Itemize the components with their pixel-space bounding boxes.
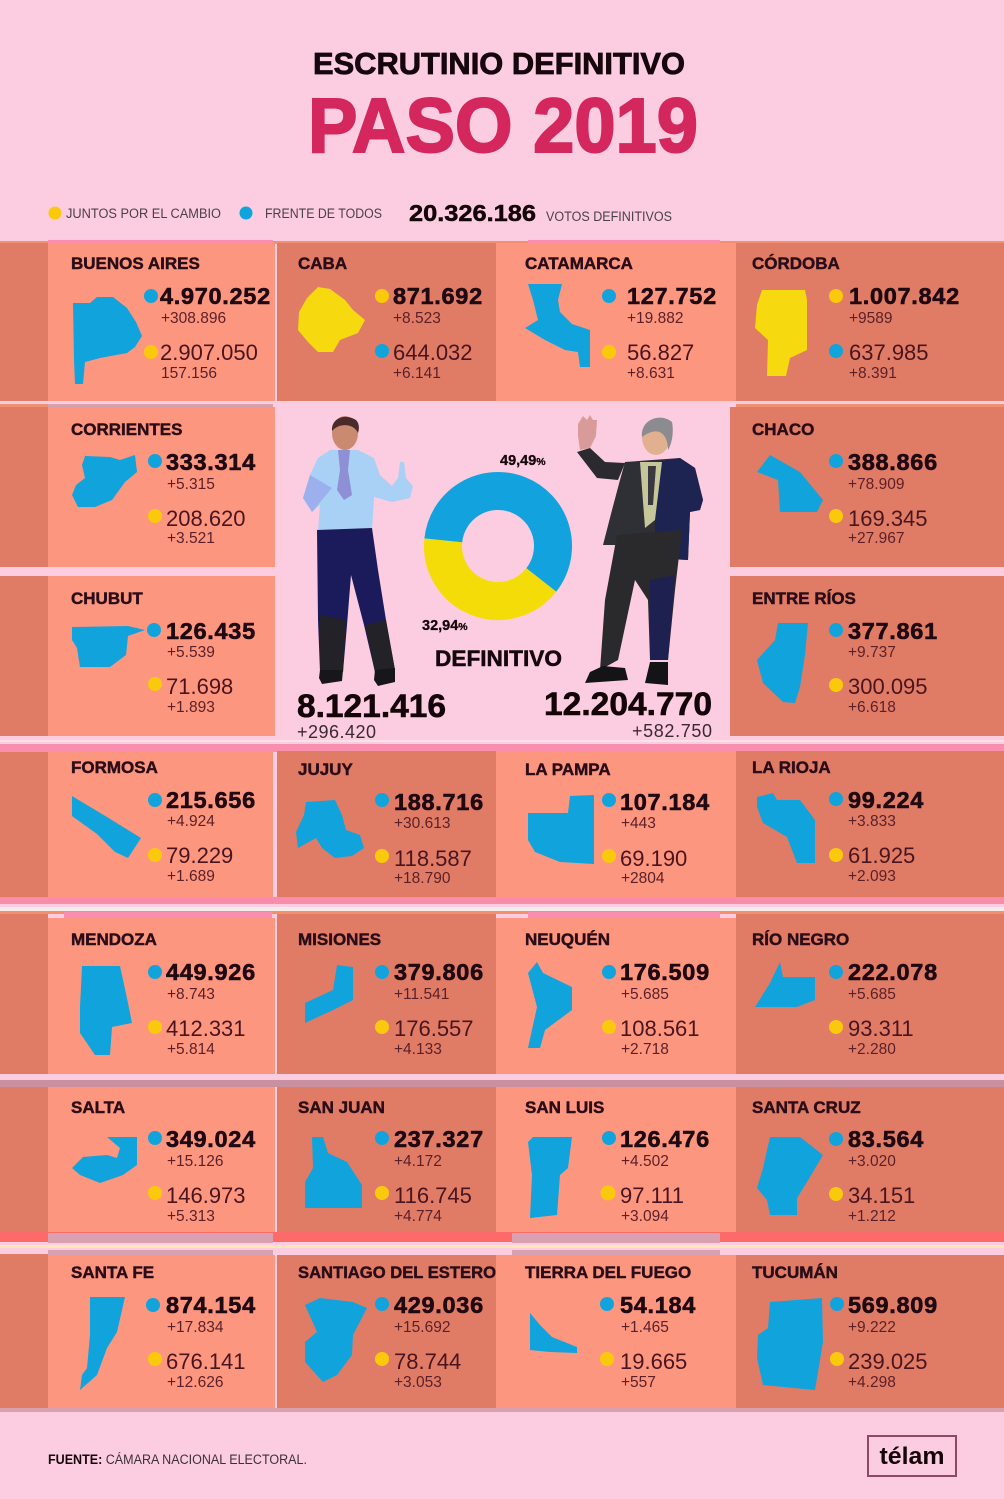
change yellow: 157.156: [161, 365, 217, 382]
votes blue: 449.926: [166, 959, 256, 985]
marker blue: [829, 792, 843, 806]
panel: Corrientes: [48, 407, 275, 567]
map: [757, 1137, 823, 1215]
photo: Fernández: [577, 415, 703, 685]
votes yellow: 239.025: [848, 1349, 928, 1374]
donut label: Juntos por el Cambio: 32,94%: [422, 618, 468, 634]
marker blue: [148, 454, 162, 468]
marker blue: [146, 1298, 160, 1312]
donut label: Frente de Todos: 49,49%: [500, 453, 546, 469]
name: CORRIENTES: [71, 420, 182, 439]
votes blue: 99.224: [848, 787, 924, 813]
votes blue: 379.806: [394, 959, 484, 985]
change yellow: +4.774: [394, 1208, 442, 1225]
votes blue: 107.184: [620, 789, 710, 815]
marker yellow: [829, 1187, 843, 1201]
panel: Chubut: [48, 576, 275, 736]
change blue: +17.834: [167, 1319, 224, 1336]
votes blue: 83.564: [848, 1126, 924, 1152]
map: [80, 1297, 125, 1390]
total: Frente de Todos: 12.204.770: [544, 686, 712, 722]
marker blue: [600, 1297, 614, 1311]
legend label: Frente de Todos: FRENTE DE TODOS: [265, 206, 382, 221]
panel: Catamarca: [496, 243, 736, 401]
map: [73, 297, 142, 384]
panel: Neuquén: [496, 918, 736, 1074]
marker yellow: [602, 1020, 616, 1034]
legend: [48, 200, 672, 226]
change yellow: +2.093: [848, 868, 896, 885]
change yellow: +27.967: [848, 530, 904, 547]
votes yellow: 676.141: [166, 1349, 246, 1374]
votes blue: 429.036: [394, 1292, 484, 1318]
marker blue: [602, 793, 616, 807]
map: [530, 1313, 577, 1353]
votes yellow: 300.095: [848, 674, 928, 699]
marker blue: [375, 1131, 389, 1145]
change yellow: +2.718: [621, 1041, 669, 1058]
votes yellow: 71.698: [166, 674, 233, 699]
votes yellow: 116.745: [394, 1183, 472, 1208]
marker blue: [602, 965, 616, 979]
marker blue: [147, 623, 161, 637]
name: LA PAMPA: [525, 760, 611, 779]
main heading: PASO 2019: [308, 83, 698, 169]
marker blue: [829, 623, 843, 637]
name: BUENOS AIRES: [71, 254, 200, 273]
votes blue: 349.024: [166, 1126, 256, 1152]
marker blue: [144, 289, 158, 303]
votes yellow: 93.311: [848, 1016, 914, 1041]
change blue: +4.172: [394, 1153, 442, 1170]
change blue: +8.743: [167, 986, 215, 1003]
marker blue: [830, 1297, 844, 1311]
votes yellow: 19.665: [620, 1349, 687, 1374]
votes yellow: 169.345: [848, 506, 928, 531]
map: [305, 1137, 362, 1208]
marker yellow: [829, 509, 843, 523]
title: ESCRUTINIO DEFINITIVO: [313, 46, 685, 81]
change blue: +15.692: [394, 1319, 450, 1336]
votes blue: 176.509: [620, 959, 710, 985]
change blue: +30.613: [394, 815, 450, 832]
source note: FUENTE: CÁMARA NACIONAL ELECTORAL.: [48, 1452, 307, 1467]
name: MISIONES: [298, 930, 381, 949]
change blue: +443: [621, 815, 656, 832]
marker yellow: [144, 345, 158, 359]
marker yellow: [600, 1186, 616, 1200]
total votes: 20.326.186: [409, 200, 536, 226]
change yellow: +1.212: [848, 1208, 896, 1225]
marker yellow: [600, 1352, 614, 1366]
votes blue: 126.435: [166, 618, 256, 644]
marker blue: [829, 344, 843, 358]
marker yellow: [148, 1186, 162, 1200]
change blue: +3.020: [848, 1153, 896, 1170]
panel: La Rioja: [736, 751, 1004, 903]
map: [72, 1137, 137, 1183]
panel: Córdoba: [736, 243, 1004, 401]
votes yellow: 108.561: [620, 1016, 700, 1041]
panel: Santa Fe: [48, 1255, 275, 1408]
votes yellow: 871.692: [393, 283, 483, 309]
map: [296, 800, 364, 858]
marker yellow: [375, 289, 389, 303]
panel: national results: [275, 407, 730, 742]
marker yellow: [375, 849, 389, 863]
total votes label: VOTOS DEFINITIVOS: [546, 209, 672, 224]
votes yellow: 56.827: [627, 340, 694, 365]
marker yellow: [148, 1352, 162, 1366]
map: [80, 966, 132, 1055]
change yellow: +9589: [849, 310, 893, 327]
legend marker: Juntos por el Cambio: [48, 206, 62, 220]
marker blue: [148, 965, 162, 979]
marker blue: [375, 344, 389, 358]
map: [525, 284, 590, 367]
change blue: +5.685: [621, 986, 669, 1003]
marker yellow: [602, 345, 616, 359]
votes yellow: 1.007.842: [849, 283, 960, 309]
map: [72, 626, 145, 667]
marker blue: [375, 793, 389, 807]
marker yellow: [829, 678, 843, 692]
votes blue: 237.327: [394, 1126, 484, 1152]
change blue: +4.924: [167, 813, 215, 830]
votes yellow: 2.907.050: [160, 340, 258, 365]
change: Juntos por el Cambio: +296.420: [297, 722, 376, 742]
change blue: +9.737: [848, 644, 896, 661]
name: FORMOSA: [71, 758, 158, 777]
marker yellow: [602, 849, 616, 863]
panel: Formosa: [48, 751, 273, 903]
panel: Entre Ríos: [730, 576, 1004, 736]
change yellow: +18.790: [394, 870, 451, 887]
marker blue: [148, 793, 162, 807]
votes blue: 222.078: [848, 959, 938, 985]
change blue: +19.882: [627, 310, 683, 327]
change yellow: +4.298: [848, 1374, 896, 1391]
name: TIERRA DEL FUEGO: [525, 1263, 691, 1282]
votes yellow: 97.111: [620, 1183, 684, 1208]
change blue: +5.315: [167, 476, 215, 493]
votes blue: 388.866: [848, 449, 938, 475]
name: SANTIAGO DEL ESTERO: [298, 1263, 496, 1282]
panel: Jujuy: [277, 751, 496, 903]
change blue: +6.141: [393, 365, 441, 382]
map: [72, 455, 137, 507]
votes blue: 377.861: [848, 618, 938, 644]
marker yellow: [148, 848, 162, 862]
panel: San Luis: [496, 1087, 736, 1237]
change yellow: +12.626: [167, 1374, 223, 1391]
name: SAN LUIS: [525, 1098, 604, 1117]
votes blue: 569.809: [848, 1292, 938, 1318]
panel: Mendoza: [48, 918, 275, 1074]
votes yellow: 34.151: [848, 1183, 915, 1208]
change blue: +8.391: [849, 365, 897, 382]
change yellow: +2804: [621, 870, 665, 887]
map: [305, 965, 353, 1023]
panel: La Pampa: [496, 751, 736, 903]
votes blue: 4.970.252: [160, 283, 271, 309]
map: [72, 796, 141, 858]
name: LA RIOJA: [752, 758, 831, 777]
marker yellow: [148, 1020, 162, 1034]
marker blue: [375, 965, 389, 979]
votes yellow: 118.587: [394, 846, 472, 871]
panel: Santa Cruz: [736, 1087, 1004, 1237]
change yellow: +5.313: [167, 1208, 215, 1225]
name: ENTRE RÍOS: [752, 589, 856, 608]
votes blue: 874.154: [166, 1292, 256, 1318]
map: [757, 623, 808, 703]
marker yellow: [829, 848, 843, 862]
panel: Río Negro: [736, 914, 1004, 1074]
votes blue: 637.985: [849, 340, 929, 365]
change yellow: +1.893: [167, 699, 215, 716]
logo: télam: [868, 1436, 956, 1476]
votes blue: 127.752: [627, 283, 717, 309]
marker yellow: [148, 677, 162, 691]
marker yellow: [829, 289, 843, 303]
name: CÓRDOBA: [752, 254, 840, 273]
map: [757, 1298, 823, 1390]
map: [305, 1298, 367, 1382]
marker blue: [829, 454, 843, 468]
change yellow: +8.631: [627, 365, 675, 382]
change blue: +9.222: [848, 1319, 896, 1336]
donut caption: DEFINITIVO: [435, 646, 562, 671]
votes blue: 188.716: [394, 789, 484, 815]
votes yellow: 412.331: [166, 1016, 246, 1041]
panel: Tucumán: [736, 1255, 1004, 1408]
name: JUJUY: [298, 760, 353, 779]
panel: San Juan: [277, 1087, 496, 1237]
votes yellow: 78.744: [394, 1349, 461, 1374]
change yellow: +6.618: [848, 699, 896, 716]
change yellow: +5.814: [167, 1041, 215, 1058]
panel: Misiones: [277, 914, 496, 1074]
marker blue: [602, 1131, 616, 1145]
marker yellow: [375, 1020, 389, 1034]
votes blue: 215.656: [166, 787, 256, 813]
legend marker: Frente de Todos: [240, 206, 252, 220]
marker blue: [829, 965, 843, 979]
map: [755, 962, 815, 1007]
votes blue: 126.476: [620, 1126, 710, 1152]
name: RÍO NEGRO: [752, 930, 849, 949]
map: [755, 290, 807, 376]
change yellow: +3.521: [167, 530, 215, 547]
marker yellow: [829, 1020, 843, 1034]
name: SANTA CRUZ: [752, 1098, 861, 1117]
marker blue: [829, 1132, 843, 1146]
name: SANTA FE: [71, 1263, 154, 1282]
marker yellow: [148, 509, 162, 523]
marker blue: [602, 289, 616, 303]
logo: télam: télam: [880, 1443, 944, 1470]
marker yellow: [375, 1352, 389, 1366]
total: Juntos por el Cambio: 8.121.416: [297, 688, 446, 724]
panel: CABA: [277, 243, 496, 401]
marker yellow: [830, 1352, 844, 1366]
votes blue: 54.184: [620, 1292, 696, 1318]
photo: Macri: [303, 416, 413, 686]
panel: Chaco: [730, 407, 1004, 567]
panel: Buenos Aires: [48, 243, 275, 401]
name: CHACO: [752, 420, 814, 439]
name: SALTA: [71, 1098, 125, 1117]
change yellow: +4.133: [394, 1041, 442, 1058]
change blue: +4.502: [621, 1153, 669, 1170]
votes yellow: 79.229: [166, 843, 233, 868]
change yellow: +2.280: [848, 1041, 896, 1058]
change blue: +3.833: [848, 813, 896, 830]
change yellow: +8.523: [393, 310, 441, 327]
change yellow: +3.053: [394, 1374, 442, 1391]
map: [298, 287, 365, 352]
map: [757, 455, 823, 512]
name: TUCUMÁN: [752, 1263, 838, 1282]
name: CHUBUT: [71, 589, 143, 608]
panel: Salta: [48, 1087, 275, 1237]
name: CATAMARCA: [525, 254, 633, 273]
map: [528, 962, 572, 1048]
map: [757, 793, 815, 863]
panel: Tierra del Fuego: [496, 1255, 736, 1408]
votes yellow: 208.620: [166, 506, 246, 531]
change blue: +78.909: [848, 476, 904, 493]
map: [528, 795, 594, 864]
change yellow: +3.094: [621, 1208, 669, 1225]
name: SAN JUAN: [298, 1098, 385, 1117]
change blue: +308.896: [161, 310, 226, 327]
marker blue: [148, 1131, 162, 1145]
panel: Santiago del Estero: [277, 1255, 496, 1408]
change blue: +5.539: [167, 644, 215, 661]
name: CABA: [298, 254, 347, 273]
donut chart: [443, 491, 553, 601]
votes yellow: 61.925: [848, 843, 915, 868]
legend label: Juntos por el Cambio: JUNTOS POR EL CAMBIO: [66, 206, 221, 221]
change yellow: +557: [621, 1374, 656, 1391]
votes yellow: 69.190: [620, 846, 687, 871]
change yellow: +1.689: [167, 868, 215, 885]
name: MENDOZA: [71, 930, 157, 949]
change blue: +5.685: [848, 986, 896, 1003]
map: [528, 1137, 572, 1218]
marker blue: [375, 1297, 389, 1311]
change: Frente de Todos: +582.750: [632, 721, 712, 741]
votes blue: 333.314: [166, 449, 256, 475]
change blue: +1.465: [621, 1319, 669, 1336]
change blue: +15.126: [167, 1153, 223, 1170]
votes yellow: 176.557: [394, 1016, 474, 1041]
change blue: +11.541: [394, 986, 449, 1003]
votes yellow: 146.973: [166, 1183, 246, 1208]
votes blue: 644.032: [393, 340, 473, 365]
name: NEUQUÉN: [525, 930, 610, 949]
marker yellow: [375, 1186, 389, 1200]
